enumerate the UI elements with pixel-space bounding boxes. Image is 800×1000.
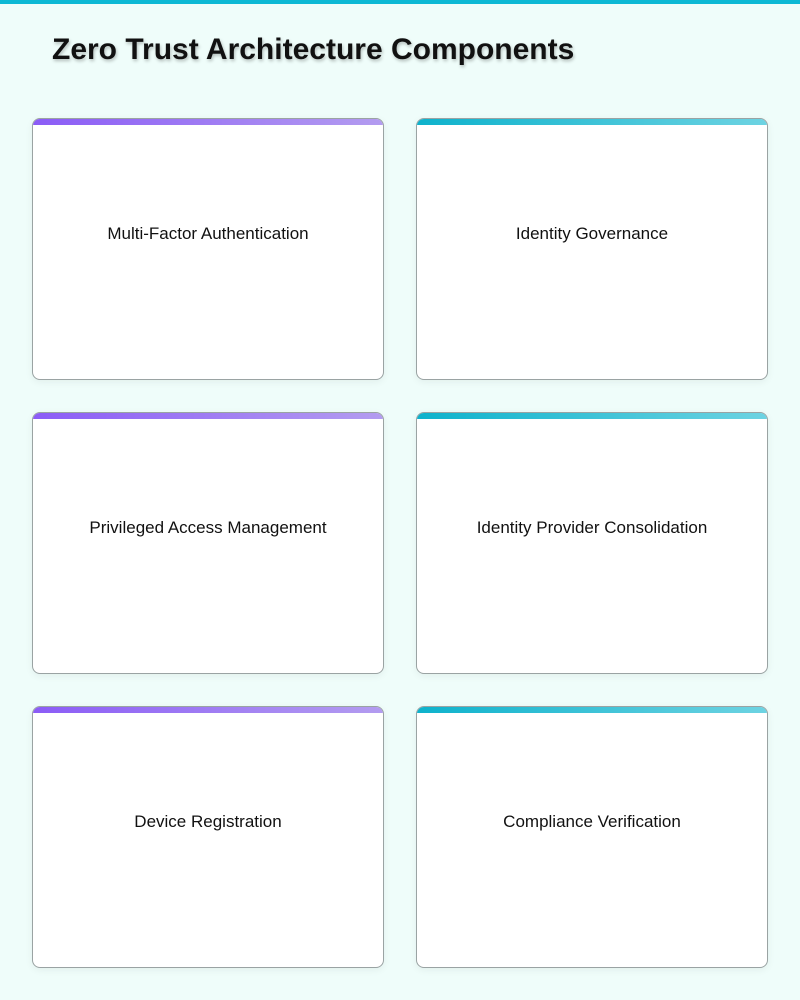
title: Zero Trust Architecture Components	[52, 33, 574, 66]
top accent bar	[0, 0, 800, 4]
panel: Privileged Access Management: Privileged Access Management	[89, 518, 327, 537]
panel: Multi-Factor Authentication: Multi-Factor Authentication	[107, 224, 309, 243]
panel: Identity Governance	[416, 118, 768, 380]
panel: Device Registration: Device Registration	[134, 812, 282, 831]
panel: Identity Governance: Identity Governance	[516, 224, 668, 243]
panel: Device Registration	[32, 706, 384, 968]
panel: Multi-Factor Authentication	[32, 118, 384, 380]
panel: Privileged Access Management	[32, 412, 384, 674]
panel: Compliance Verification: Compliance Verification	[503, 812, 681, 831]
panel: Identity Provider Consolidation	[416, 412, 768, 674]
panel: Identity Provider Consolidation: Identity Provider Consolidation	[477, 518, 707, 537]
panel: Compliance Verification	[416, 706, 768, 968]
